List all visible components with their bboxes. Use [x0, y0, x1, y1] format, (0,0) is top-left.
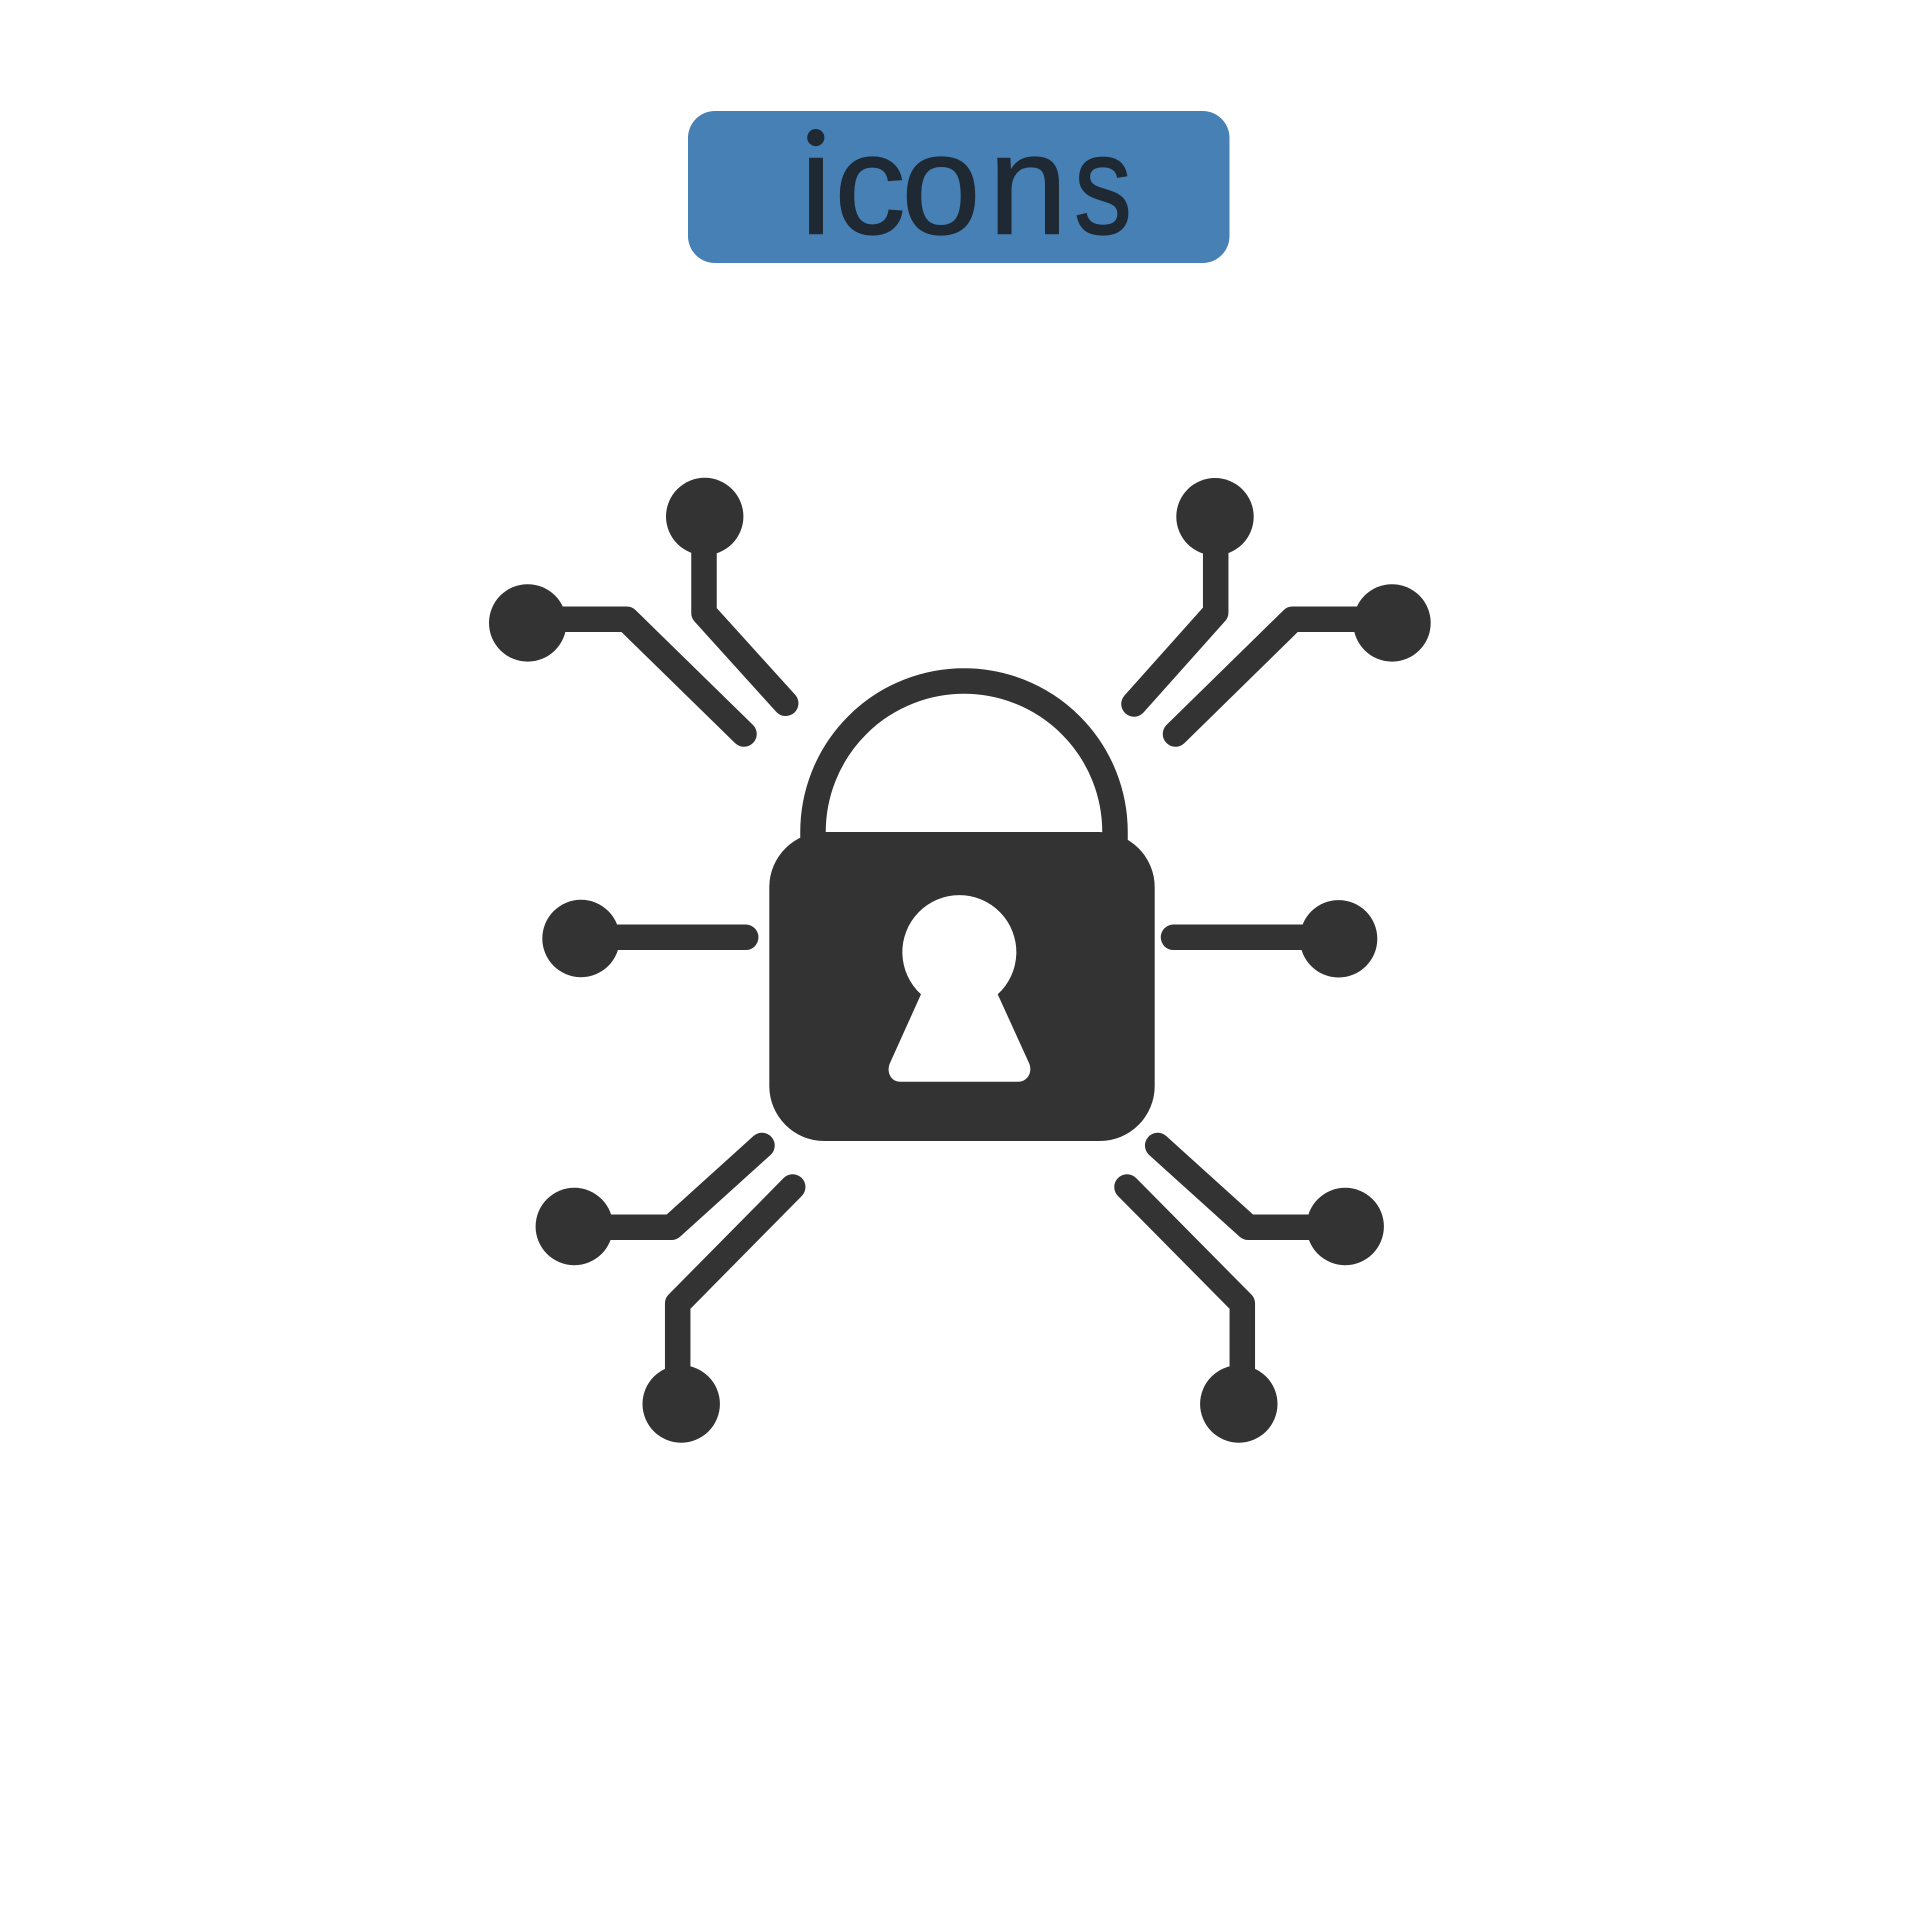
circuit line: lower left inner: [642, 1187, 793, 1443]
icon: padlock: [769, 681, 1155, 1141]
circuit line: top right outer: [1176, 584, 1431, 734]
heading text: s: [1074, 106, 1132, 264]
padlock shackle: [813, 681, 1115, 850]
circuit line: top left inner: [666, 478, 786, 703]
circuit line: lower left outer: [536, 1146, 762, 1265]
round dot of the letter i: [804, 124, 828, 148]
badge: icons heading: [688, 106, 1230, 264]
circuit line: top right inner: [1134, 478, 1254, 704]
circuit line: middle left: [542, 900, 746, 977]
circuit line: lower right outer: [1158, 1146, 1384, 1265]
circuit line: lower right inner: [1127, 1187, 1278, 1443]
heading text: icon: [800, 106, 1067, 264]
padlock body with keyhole: [769, 832, 1155, 1141]
badge background: [688, 111, 1230, 263]
circuit line: middle right: [1174, 900, 1377, 978]
circuit line: top left outer: [489, 584, 744, 734]
